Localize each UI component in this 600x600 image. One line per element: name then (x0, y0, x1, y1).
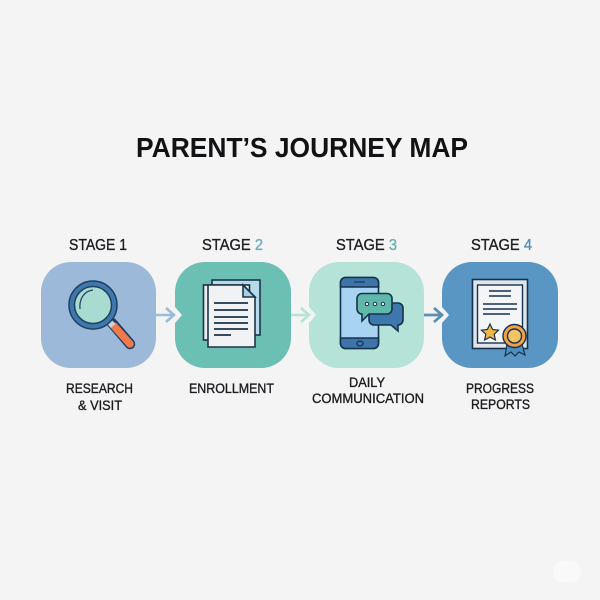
icon: certificate with star and rosette (472, 280, 528, 356)
icon: magnifying glass (69, 281, 130, 344)
stage 3 caption (312, 375, 424, 406)
stage 3 caption: COMMUNICATION (312, 391, 424, 406)
stage 3 caption: DAILY (349, 375, 385, 390)
stage 4 caption: REPORTS (471, 397, 530, 412)
icon: documents (204, 280, 260, 347)
stage 4 heading: STAGE 4 (471, 237, 532, 254)
stage 1 caption (66, 381, 133, 413)
stage 1 card (41, 262, 156, 368)
stage 2 card (175, 262, 291, 368)
panel: stage 4 progress reports (442, 237, 558, 412)
stage 1 caption: & VISIT (78, 398, 122, 413)
arrow: stage 1 to stage 2 (156, 308, 174, 322)
stage 1 caption: RESEARCH (66, 381, 133, 396)
stage 3 heading: STAGE 3 (336, 237, 397, 254)
panel: stage 3 daily communication (309, 237, 424, 406)
stage 4 caption: PROGRESS (466, 381, 534, 396)
stage 2 heading: STAGE 2 (202, 237, 263, 254)
title: PARENT’S JOURNEY MAP (136, 132, 468, 163)
panel: stage 2 enrollment (175, 237, 291, 396)
stage 1 heading: STAGE 1 (69, 237, 127, 254)
icon: phone with chat bubbles (340, 278, 403, 348)
watermark blob (553, 561, 581, 582)
stage 4 card (442, 262, 558, 368)
panel: stage 1 research and visit (41, 237, 156, 413)
stage 2 caption: ENROLLMENT (189, 381, 274, 396)
stage 4 caption (466, 381, 534, 412)
arrow: stage 3 to stage 4 (424, 308, 442, 322)
arrow: stage 2 to stage 3 (291, 308, 309, 322)
stage 3 card (309, 262, 424, 368)
